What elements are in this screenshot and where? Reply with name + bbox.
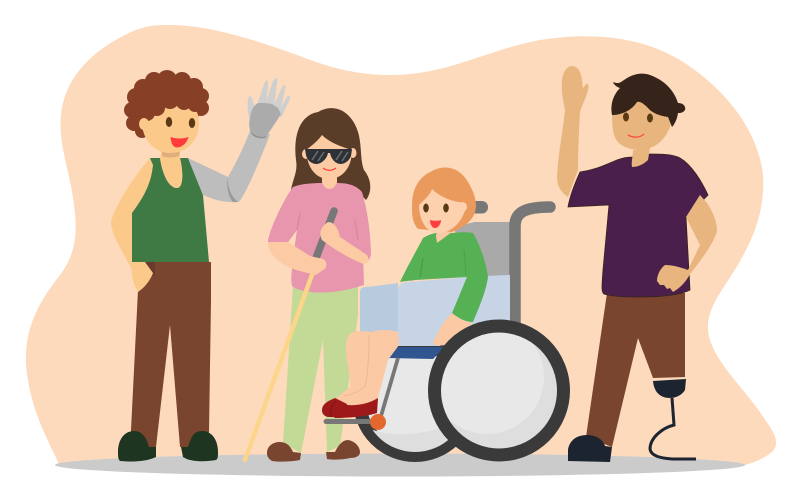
- neck: [322, 175, 337, 189]
- long hair: [291, 108, 370, 200]
- prosthetic arm: [188, 78, 290, 202]
- orange hub: [370, 414, 386, 430]
- neck: [632, 148, 650, 167]
- small wheel: [355, 345, 456, 462]
- back cushion: [440, 275, 510, 345]
- shoes: [118, 431, 218, 462]
- chair frame: [515, 207, 550, 322]
- shirt: [400, 232, 488, 322]
- arms: [268, 222, 369, 275]
- neck: [160, 148, 182, 188]
- person: man with prosthetic leg: [557, 66, 717, 462]
- prosthetic hand: [248, 78, 290, 138]
- cane: [245, 211, 334, 460]
- hand on lap: [433, 313, 473, 346]
- face: [306, 135, 352, 179]
- pants: [131, 262, 211, 447]
- hair back: [412, 167, 476, 232]
- seat: [388, 347, 445, 359]
- right arm: [657, 195, 717, 292]
- mouth: [170, 137, 188, 148]
- prosthetic leg: [650, 379, 696, 459]
- mouth: [430, 220, 441, 228]
- lap cover: [360, 283, 398, 346]
- eyes: [423, 204, 449, 212]
- face: [142, 101, 199, 153]
- chair back: [452, 222, 510, 276]
- mouth: [628, 134, 644, 137]
- shirt: [568, 154, 708, 297]
- shoe: [568, 435, 612, 462]
- person: man with prosthetic arm: [111, 70, 290, 462]
- sunglasses: [305, 149, 352, 164]
- face: [419, 189, 466, 233]
- pants: [283, 287, 358, 453]
- left arm: [111, 158, 160, 292]
- footrest strut: [381, 358, 398, 416]
- ground shadow: [55, 454, 745, 476]
- pants: [586, 293, 685, 447]
- ear: [139, 118, 149, 130]
- face: [612, 95, 672, 150]
- hair: [611, 74, 685, 127]
- raised arm: [557, 66, 589, 197]
- person: blind woman with cane: [245, 108, 371, 462]
- mouth: [323, 168, 336, 170]
- wheelchair user: [322, 167, 550, 470]
- tank top: [132, 158, 209, 262]
- red shoes: [322, 398, 378, 418]
- head: [124, 70, 209, 153]
- legs: [335, 330, 399, 408]
- back hair: [124, 70, 209, 138]
- bangs: [139, 91, 202, 121]
- big wheel: [430, 320, 564, 455]
- shoes: [267, 440, 360, 462]
- eyes: [623, 112, 653, 122]
- neck: [436, 226, 452, 243]
- shirt: [268, 183, 371, 293]
- eyes: [166, 117, 195, 128]
